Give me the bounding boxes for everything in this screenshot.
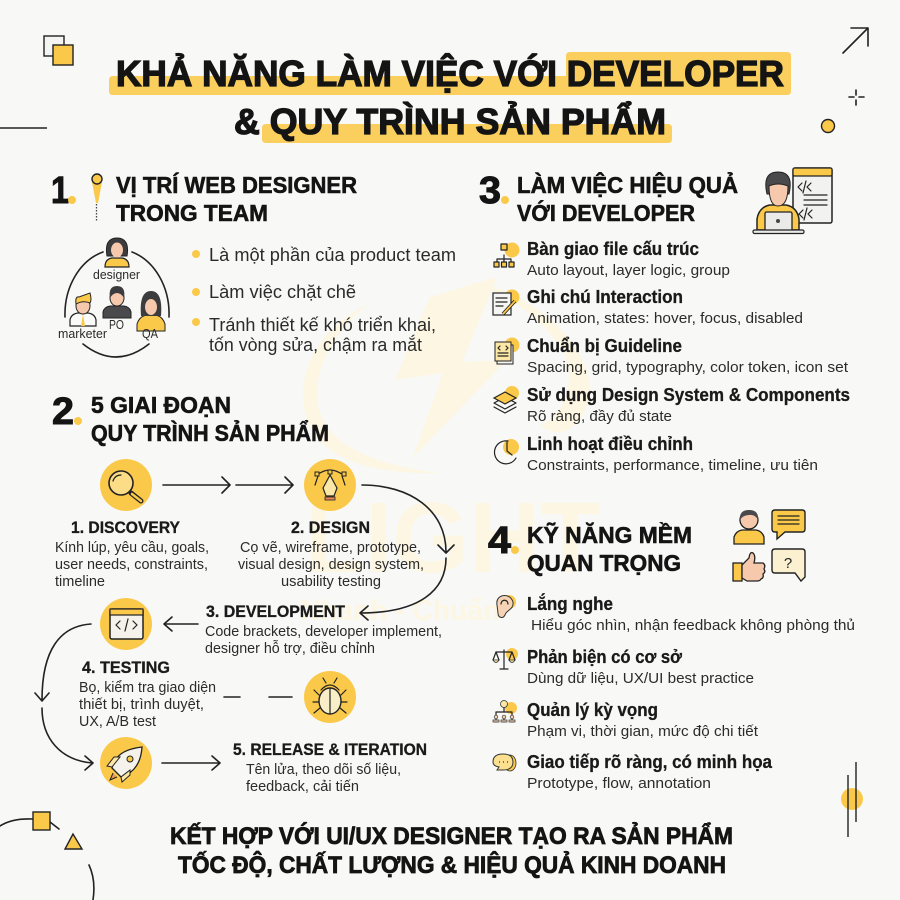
icon: expectation hierarchy bbox=[493, 700, 517, 722]
section 1 heading: VỊ TRÍ WEB DESIGNER bbox=[116, 171, 357, 198]
section 4 list: Phản biện có cơ sở bbox=[527, 647, 682, 667]
title bbox=[109, 52, 791, 143]
section 3 list: Auto layout, layer logic, group bbox=[527, 262, 730, 279]
step 1 text: Kính lúp, yêu cầu, goals, bbox=[55, 540, 209, 556]
section 1 bullets: Là một phần của product team bbox=[209, 245, 456, 265]
section 3 heading bbox=[479, 170, 738, 226]
step 3 text: designer hỗ trợ, điều chỉnh bbox=[205, 640, 375, 657]
section 3 list: Sử dụng Design System & Components bbox=[527, 385, 850, 405]
step 1 icon: magnifier bbox=[100, 459, 152, 511]
section 1 heading: 1 bbox=[51, 170, 69, 212]
icon group: soft skills bbox=[733, 510, 805, 581]
section 1 heading: TRONG TEAM bbox=[116, 200, 268, 226]
icon: guideline document bbox=[495, 338, 520, 364]
icon: developer with laptop bbox=[753, 168, 832, 234]
section 3 list: Ghi chú Interaction bbox=[527, 287, 683, 307]
section 1 bullets: tốn vòng sửa, chậm ra mắt bbox=[209, 334, 422, 355]
section 4 list: Giao tiếp rõ ràng, có minh họa bbox=[527, 752, 773, 772]
team circle diagram: marketer bbox=[58, 326, 108, 341]
decorative circle and lines bottom right bbox=[841, 762, 863, 837]
section 3 list bbox=[493, 239, 850, 474]
icon: pin bbox=[92, 174, 102, 221]
thumbs up bbox=[733, 553, 765, 581]
step 3 text: Code brackets, developer implement, bbox=[205, 624, 442, 640]
section 1 bullets: Làm việc chặt chẽ bbox=[209, 282, 356, 302]
section 4 heading: KỸ NĂNG MỀM bbox=[527, 521, 692, 548]
step 1 text: user needs, constraints, bbox=[55, 557, 208, 573]
section 3 list: Spacing, grid, typography, color token, icon set bbox=[527, 359, 849, 376]
step 4 text: thiết bị, trình duyệt, bbox=[79, 697, 204, 713]
step 2 text bbox=[238, 519, 424, 590]
section 4 list bbox=[493, 593, 855, 792]
section 4 list: Quản lý kỳ vọng bbox=[527, 700, 658, 720]
icon: clock bbox=[494, 439, 519, 464]
step 5 text bbox=[233, 741, 427, 795]
watermark: lightning logo bbox=[300, 277, 600, 627]
step 5 text: 5. RELEASE & ITERATION bbox=[233, 741, 427, 759]
step 4 text: 4. TESTING bbox=[82, 659, 170, 677]
section 2 heading bbox=[52, 391, 329, 446]
step 5 text: Tên lửa, theo dõi số liệu, bbox=[246, 762, 401, 778]
marketer bbox=[70, 293, 96, 326]
question bubble: ? bbox=[784, 555, 792, 572]
step 4 text: UX, A/B test bbox=[79, 714, 156, 730]
step 5 text: feedback, cải tiến bbox=[246, 779, 359, 795]
step 2 icon: pen tool bbox=[304, 459, 356, 511]
footer message: KẾT HỢP VỚI UI/UX DESIGNER TẠO RA SẢN PHẨM bbox=[170, 821, 733, 850]
decorative squares top left bbox=[44, 36, 73, 65]
step 2 text: 2. DESIGN bbox=[291, 519, 370, 537]
section 2 heading: QUY TRÌNH SẢN PHẨM bbox=[91, 418, 329, 446]
section 3 list: Animation, states: hover, focus, disabled bbox=[527, 310, 803, 327]
title: & QUY TRÌNH SẢN PHẨM bbox=[234, 100, 666, 142]
QA bbox=[137, 291, 165, 331]
icon: chat bubbles bbox=[493, 754, 516, 771]
section 1 bullets bbox=[192, 245, 456, 355]
step 5 icon: rocket bbox=[100, 737, 152, 789]
title: KHẢ NĂNG LÀM VIỆC VỚI DEVELOPER bbox=[116, 52, 784, 94]
step 4 icon: bug bbox=[304, 671, 356, 723]
step 1 text bbox=[55, 519, 209, 590]
decorative dot bbox=[822, 120, 834, 132]
icon: note with pencil bbox=[493, 290, 520, 315]
step 4 text bbox=[79, 659, 216, 730]
step 2 text: usability testing bbox=[281, 574, 381, 590]
section 1 bullets: Tránh thiết kế khó triển khai, bbox=[209, 315, 436, 335]
section 3 heading: VỚI DEVELOPER bbox=[517, 199, 695, 226]
icon: layers bbox=[494, 386, 519, 413]
section 2 heading: 5 GIAI ĐOẠN bbox=[91, 392, 231, 418]
footer message bbox=[170, 821, 733, 879]
step 3 text: 3. DEVELOPMENT bbox=[206, 603, 345, 621]
section 3 list: Chuẩn bị Guideline bbox=[527, 336, 682, 356]
icon: hierarchy bbox=[494, 242, 520, 267]
step 2 text: Cọ vẽ, wireframe, prototype, bbox=[240, 540, 421, 556]
section 2 heading: 2 bbox=[52, 391, 74, 433]
watermark: lightning logo: Nhanh - Chuẩn bbox=[300, 595, 500, 627]
section 4 list: Lắng nghe bbox=[527, 593, 613, 614]
section 3 heading: LÀM VIỆC HIỆU QUẢ bbox=[517, 170, 738, 198]
team circle diagram: QA bbox=[142, 326, 158, 341]
decorative sparkle bbox=[849, 90, 864, 105]
icon: scales bbox=[493, 648, 518, 669]
team circle diagram bbox=[58, 238, 169, 357]
section 3 list: Constraints, performance, timeline, ưu tiên bbox=[527, 457, 818, 474]
team circle diagram: PO bbox=[109, 317, 124, 332]
section 1 heading bbox=[51, 170, 357, 226]
section 3 list: Rõ ràng, đầy đủ state bbox=[527, 408, 672, 425]
step 2 text: visual design, design system, bbox=[238, 557, 424, 573]
step 1 text: timeline bbox=[55, 574, 105, 590]
decorative shapes bottom left bbox=[0, 812, 94, 900]
section 3 list: Linh hoạt điều chỉnh bbox=[527, 434, 693, 454]
PO bbox=[103, 286, 131, 318]
decorative line left bbox=[0, 127, 47, 129]
section 3 heading: 3 bbox=[479, 170, 501, 212]
section 4 heading: 4 bbox=[488, 520, 511, 562]
section 4 list: Phạm vi, thời gian, mức độ chi tiết bbox=[527, 723, 759, 740]
step 3 icon: code window bbox=[100, 598, 152, 650]
section 4 list: Hiểu góc nhìn, nhận feedback không phòng thủ bbox=[531, 617, 855, 634]
designer bbox=[105, 238, 129, 267]
section 3 list: Bàn giao file cấu trúc bbox=[527, 239, 699, 259]
person bbox=[734, 510, 764, 544]
step 3 text bbox=[205, 603, 442, 657]
section 4 list: Dùng dữ liệu, UX/UI best practice bbox=[527, 670, 754, 687]
icon: ear bbox=[497, 595, 516, 617]
step 4 text: Bọ, kiểm tra giao diện bbox=[79, 680, 216, 696]
section 4 heading: QUAN TRỌNG bbox=[527, 550, 681, 576]
decorative arrow top right bbox=[843, 28, 868, 53]
step 1 text: 1. DISCOVERY bbox=[71, 519, 180, 537]
process flow arrows bbox=[35, 477, 454, 770]
title highlight bbox=[109, 52, 791, 143]
team circle diagram: designer bbox=[93, 267, 141, 282]
speech bubble bbox=[772, 510, 805, 539]
watermark: lightning logo: LIGHT bbox=[305, 482, 600, 594]
section 4 heading bbox=[488, 520, 692, 576]
footer message: TỐC ĐỘ, CHẤT LƯỢNG & HIỆU QUẢ KINH DOANH bbox=[178, 850, 726, 879]
section 4 list: Prototype, flow, annotation bbox=[527, 775, 711, 792]
